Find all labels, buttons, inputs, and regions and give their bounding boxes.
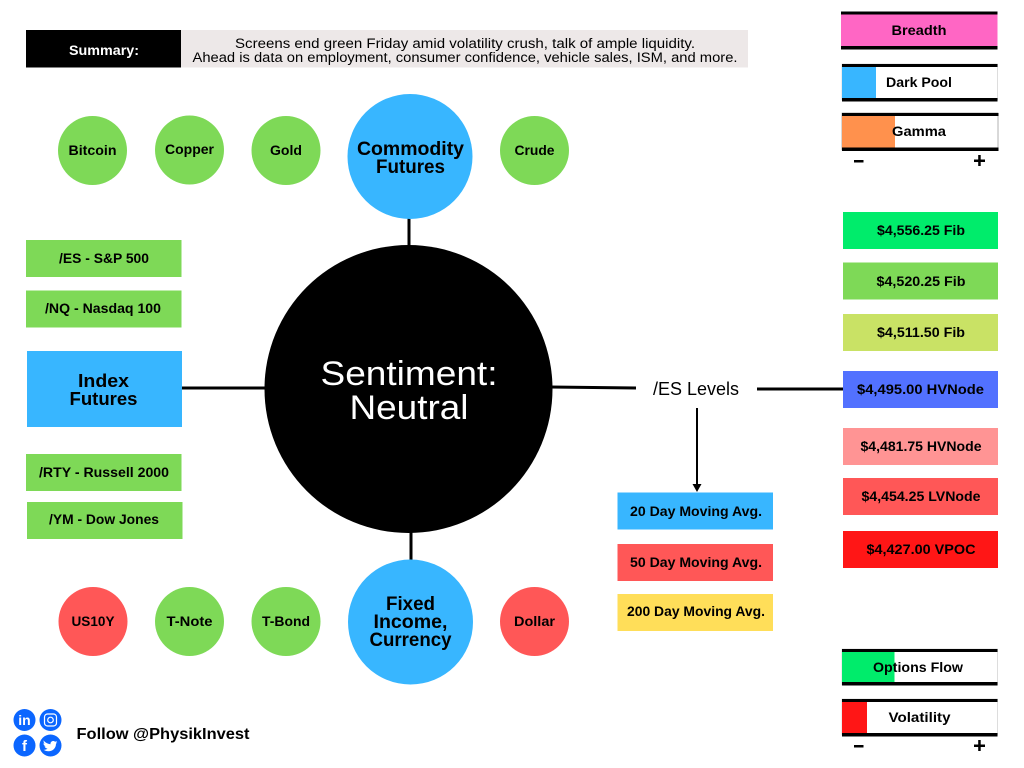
box: /ES S&P 500: /ES - S&P 500 (59, 251, 149, 266)
central circle: sentiment: Neutral (350, 389, 468, 427)
gauge: options flow (842, 649, 998, 686)
gauge: options flow: Options Flow (873, 660, 964, 675)
commodity: copper: Copper (165, 142, 215, 157)
gauge: gamma (842, 113, 998, 151)
commodity: gold: Gold (270, 143, 302, 158)
summary bar: Summary: (69, 42, 139, 58)
circle: commodity futures: Commodity (357, 139, 464, 160)
central circle: sentiment (264, 245, 552, 533)
scale: minus plus (bottom) (854, 740, 985, 751)
circle: fixed income, currency: Fixed (386, 594, 435, 615)
fixed income: T-Bond (252, 587, 320, 656)
level: 4481.75 hvnode: $4,481.75 HVNode (860, 439, 982, 454)
box: /ES S&P 500 (26, 240, 182, 277)
level: 4427 vpoc (843, 531, 998, 568)
icon: instagram (40, 709, 62, 731)
moving average: 50 day: 50 Day Moving Avg. (630, 555, 762, 570)
level: 4511.50 fib: $4,511.50 Fib (877, 325, 965, 340)
currency: dollar: Dollar (514, 614, 556, 629)
fixed income: US10Y (58, 587, 128, 656)
arrow: levels to moving averages (692, 484, 702, 492)
commodity: bitcoin (58, 116, 127, 185)
moving average: 20 day (618, 492, 773, 530)
fixed income: T-Note: T-Note (166, 614, 213, 629)
level: 4427 vpoc: $4,427.00 VPOC (866, 542, 976, 557)
moving average: 200 day (618, 594, 773, 631)
level: 4520.25 fib: $4,520.25 Fib (876, 274, 966, 289)
moving average: 200 day: 200 Day Moving Avg. (627, 604, 765, 619)
circle: fixed income, currency: Income, (374, 612, 448, 633)
circle: fixed income, currency (348, 560, 473, 684)
summary bar (26, 30, 748, 68)
fixed income: US10Y: US10Y (72, 614, 114, 629)
currency: dollar (500, 587, 569, 656)
social icons (14, 709, 62, 756)
box: index futures: Futures (70, 389, 138, 409)
gauge: gamma: Gamma (892, 124, 947, 139)
gauge: volatility (842, 699, 998, 736)
follow text: Follow @PhysikInvest (76, 726, 250, 743)
label: /ES levels: /ES Levels (653, 379, 739, 399)
commodity: copper (155, 116, 224, 184)
commodity: crude: Crude (514, 143, 555, 158)
central circle: sentiment: Sentiment: (320, 355, 498, 393)
icon: facebook: f (22, 738, 28, 755)
level: 4454.25 lvnode (843, 478, 998, 515)
level: 4511.50 fib (843, 314, 998, 351)
gauge: volatility: Volatility (888, 710, 951, 725)
circle: commodity futures (348, 94, 472, 219)
box: /YM Dow Jones (27, 502, 182, 539)
connector lines (182, 215, 843, 562)
commodity: bitcoin: Bitcoin (68, 143, 116, 158)
level: 4495 hvnode: $4,495.00 HVNode (857, 382, 985, 397)
box: index futures (27, 351, 182, 427)
level: 4454.25 lvnode: $4,454.25 LVNode (862, 489, 981, 504)
level: 4481.75 hvnode (843, 428, 998, 465)
gauge: dark pool: Dark Pool (886, 75, 952, 90)
box: /NQ Nasdaq 100: /NQ - Nasdaq 100 (45, 301, 161, 316)
circle: commodity futures: Futures (376, 157, 445, 178)
icon: twitter (40, 734, 62, 756)
moving average: 50 day (618, 544, 773, 581)
box: /YM Dow Jones: /YM - Dow Jones (49, 512, 159, 527)
moving average: 20 day: 20 Day Moving Avg. (630, 504, 762, 519)
box: /RTY Russell 2000 (26, 454, 182, 491)
level: 4556.25 fib: $4,556.25 Fib (877, 223, 965, 238)
box: index futures: Index (78, 371, 129, 391)
level: 4520.25 fib (843, 262, 998, 300)
scale: minus plus (top) (854, 155, 985, 166)
level: 4495 hvnode (843, 371, 998, 408)
commodity: gold (252, 116, 320, 185)
commodity: crude (500, 116, 569, 185)
fixed income: T-Note (155, 587, 224, 656)
level: 4556.25 fib (843, 212, 998, 249)
gauge: breadth: Breadth (892, 23, 946, 38)
summary bar: Ahead is data on employment, consumer confidence, vehicle sales, ISM, and more. (192, 50, 738, 65)
circle: fixed income, currency: Currency (370, 630, 452, 651)
gauge: breadth (841, 12, 998, 50)
gauge: dark pool (842, 64, 998, 102)
box: /NQ Nasdaq 100 (26, 290, 182, 328)
box: /RTY Russell 2000: /RTY - Russell 2000 (39, 465, 169, 480)
icon: linkedin: in (18, 712, 31, 728)
summary bar: Screens end green Friday amid volatility crush, talk of ample liquidity. (235, 36, 695, 51)
fixed income: T-Bond: T-Bond (262, 614, 310, 629)
